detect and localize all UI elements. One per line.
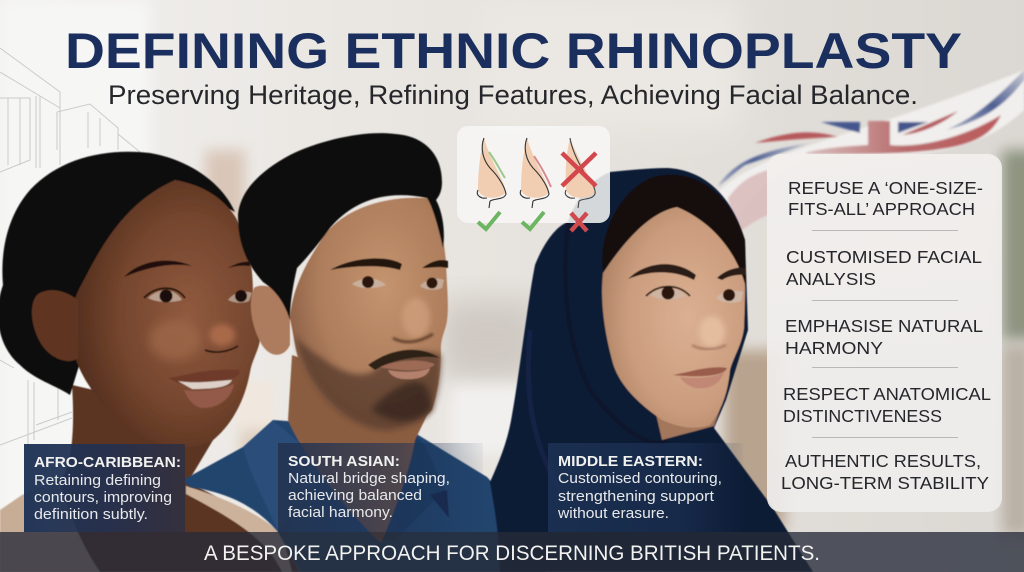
- shirt: [183, 420, 545, 572]
- caption: Middle Eastern: [548, 443, 743, 532]
- caption: Middle Eastern: strengthening support: [558, 489, 714, 505]
- panel: key principles: ANALYSIS: [786, 269, 876, 289]
- panel: key principles: CUSTOMISED FACIAL: [786, 247, 982, 267]
- beard: [295, 335, 441, 430]
- caption: Afro-Caribbean: definition subtly.: [34, 507, 148, 523]
- icon: nose one with approval: [477, 138, 506, 229]
- nose comparison card: [457, 126, 610, 231]
- panel: key principles: EMPHASISE NATURAL: [785, 316, 983, 336]
- panel: key principles: DISTINCTIVENESS: [783, 406, 942, 426]
- ear: [32, 290, 78, 361]
- hair: [238, 133, 444, 320]
- panel: key principles: [767, 154, 1002, 512]
- bottom banner: A BESPOKE APPROACH FOR DISCERNING BRITISH PATIENTS.: [204, 542, 820, 565]
- Union Jack ribbon: [718, 70, 1024, 240]
- title: DEFINING ETHNIC RHINOPLASTY: [65, 23, 962, 79]
- person: Afro-Caribbean woman: [0, 152, 300, 572]
- features: [330, 258, 448, 379]
- icon: nose three rejected: [562, 138, 596, 231]
- hair and bun: [0, 152, 235, 395]
- caption: Middle Eastern: without erasure.: [557, 506, 669, 522]
- garment: [0, 480, 100, 572]
- subtitle: Preserving Heritage, Refining Features, Achieving Facial Balance.: [108, 80, 918, 110]
- caption: Afro-Caribbean: AFRO-CARIBBEAN:: [34, 454, 181, 471]
- caption: South Asian: SOUTH ASIAN:: [288, 453, 400, 470]
- caption: Afro-Caribbean: Retaining defining: [34, 473, 161, 489]
- collar: [186, 486, 292, 572]
- hair: [602, 175, 746, 288]
- neck: [288, 355, 432, 543]
- hijab: [490, 168, 813, 572]
- panel: key principles: REFUSE A ‘ONE-SIZE-: [788, 178, 983, 198]
- panel: key principles: AUTHENTIC RESULTS,: [785, 451, 981, 471]
- icon: nose two with approval: [520, 138, 551, 229]
- caption: Middle Eastern: Customised contouring,: [558, 471, 722, 487]
- panel: key principles: FITS-ALL’ APPROACH: [788, 199, 975, 219]
- panel: key principles: RESPECT ANATOMICAL: [783, 384, 991, 404]
- face: [290, 198, 448, 430]
- neck: [655, 395, 725, 440]
- caption: South Asian: Natural bridge shaping,: [288, 471, 450, 487]
- panel: key principles: LONG-TERM STABILITY: [781, 473, 989, 493]
- caption: South Asian: achieving balanced: [288, 488, 422, 504]
- face: [70, 180, 260, 447]
- caption: Afro-Caribbean: contours, improving: [34, 490, 172, 506]
- caption: South Asian: facial harmony.: [288, 505, 393, 521]
- line drawing: British townhouse: [0, 48, 140, 446]
- caption: Middle Eastern: MIDDLE EASTERN:: [558, 453, 703, 470]
- face: [602, 207, 745, 428]
- caption: South Asian: [278, 443, 483, 532]
- neck and chest: [60, 385, 300, 572]
- panel: key principles: HARMONY: [785, 338, 883, 358]
- ear: [251, 286, 290, 355]
- bottom banner: [0, 532, 1024, 572]
- person: Middle Eastern woman: [490, 168, 813, 572]
- features: [628, 264, 746, 388]
- features: [124, 261, 252, 408]
- caption: Afro-Caribbean: [24, 444, 185, 532]
- person: South Asian man: [183, 133, 545, 572]
